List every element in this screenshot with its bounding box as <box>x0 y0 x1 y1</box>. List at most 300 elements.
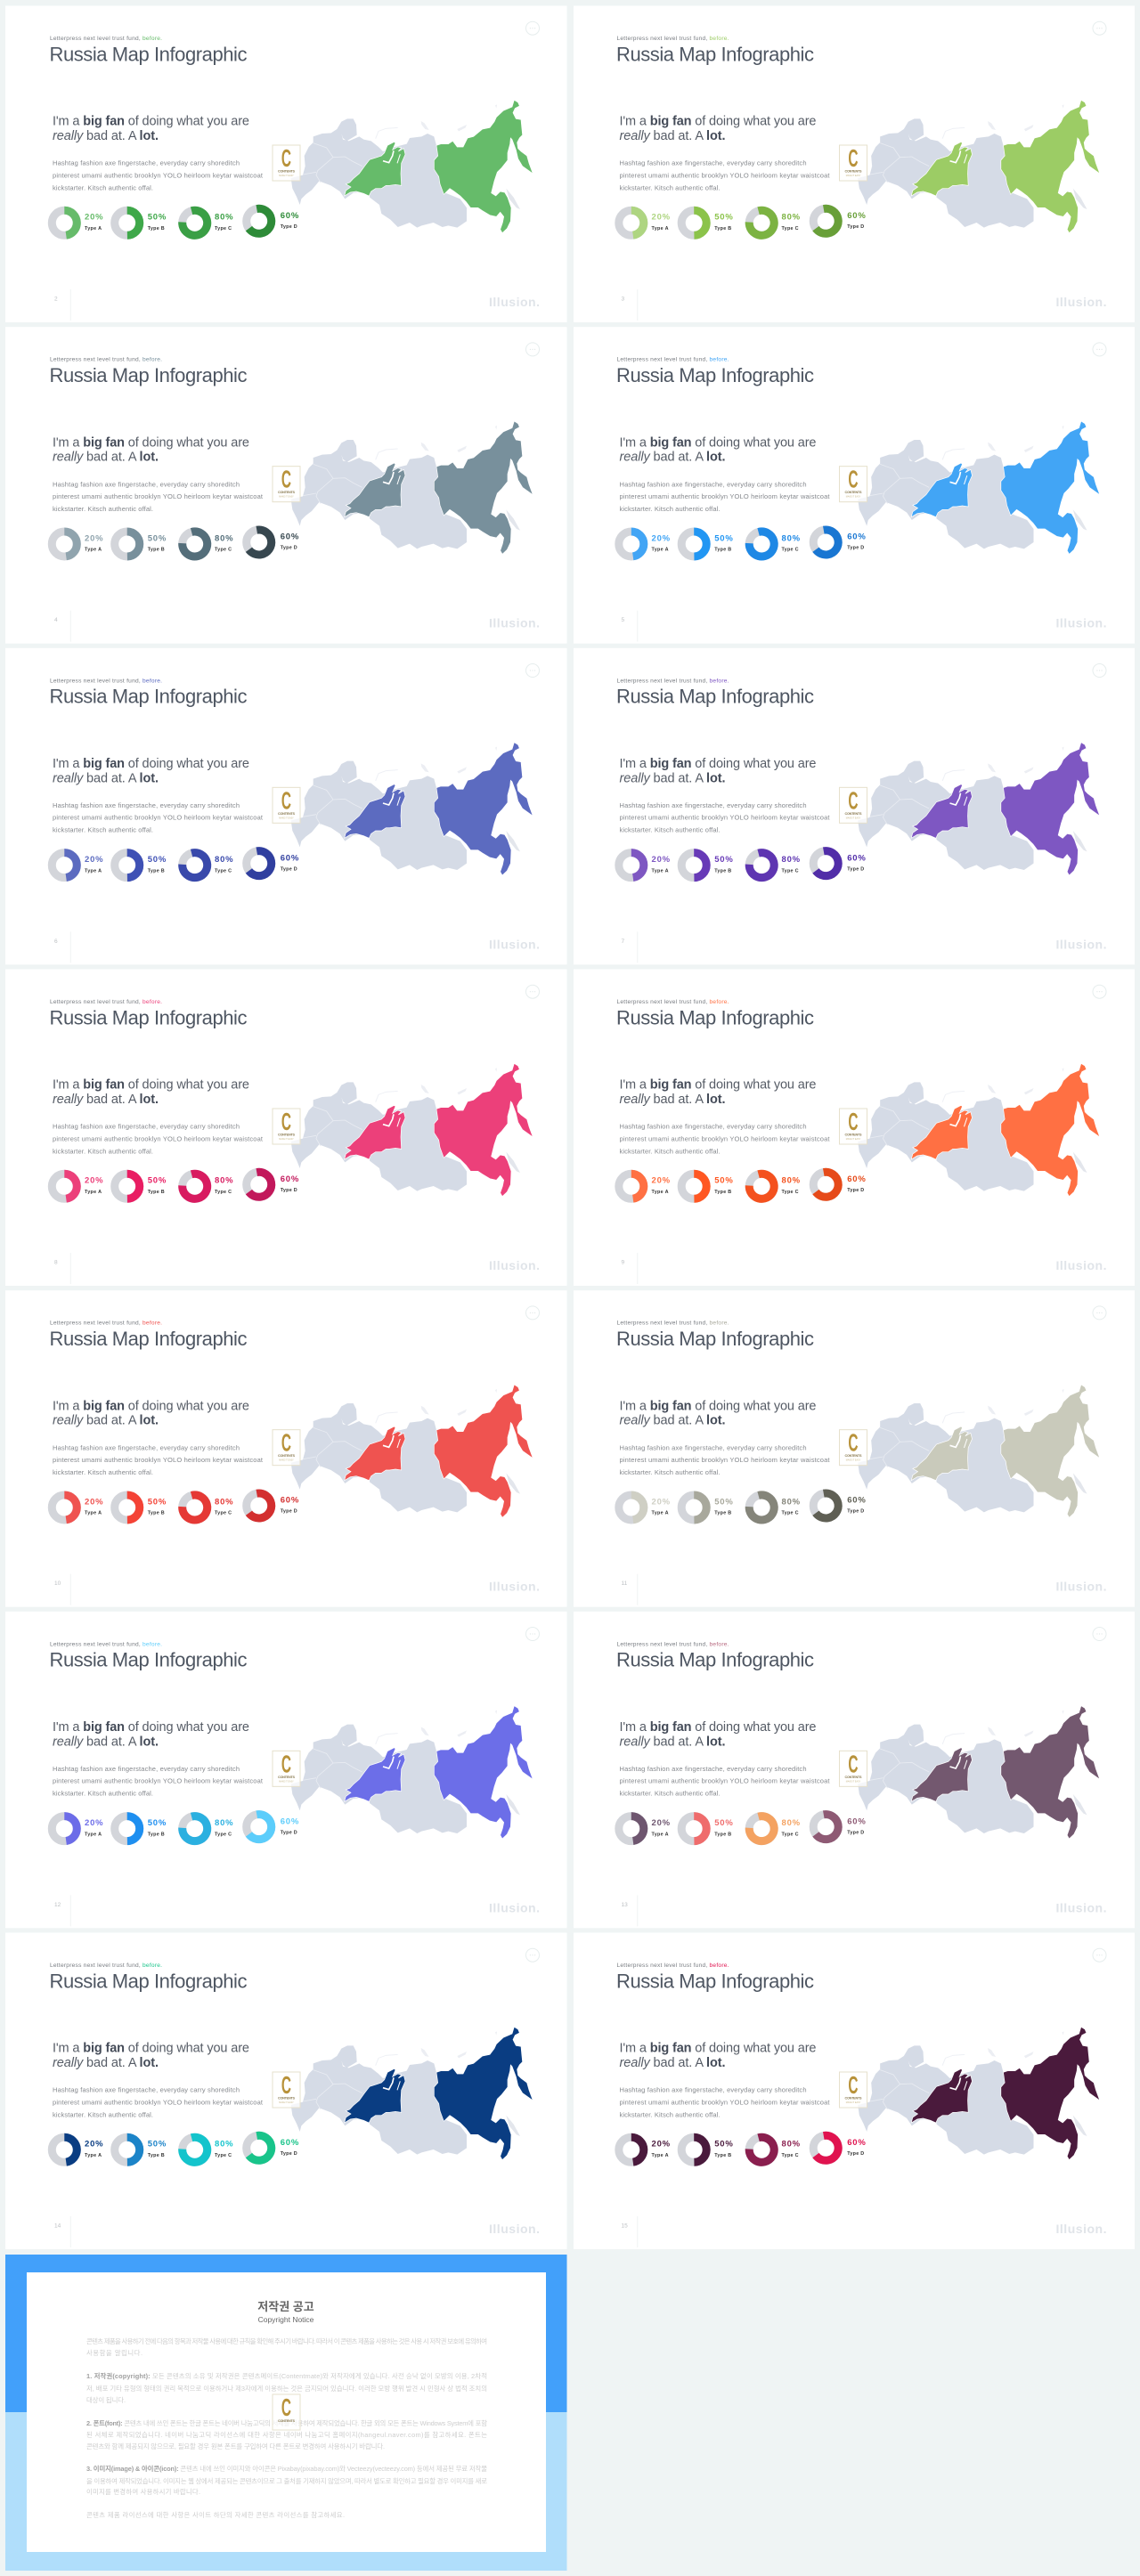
donut: Type A: Type A <box>85 1832 102 1837</box>
body text <box>620 801 830 834</box>
donut: Type A: 20% <box>85 1176 103 1186</box>
body text: kickstarter. Kitsch authentic offal. <box>53 183 153 191</box>
watermark logo: CONTENTS <box>844 169 862 173</box>
donut: Type A: 20% <box>85 213 103 223</box>
page number: 6 <box>54 939 58 945</box>
donut: Type B <box>115 210 167 235</box>
donut: Type A <box>52 1495 103 1520</box>
body text: kickstarter. Kitsch authentic offal. <box>53 2110 153 2118</box>
donut: Type A: 20% <box>85 1497 103 1507</box>
notice paragraph copyright: 대상이 됩니다. <box>86 2396 126 2404</box>
watermark logo: C <box>848 1751 859 1778</box>
menu icon <box>525 1306 540 1320</box>
page number <box>622 2216 638 2247</box>
donut: Type A: Type A <box>652 548 669 553</box>
page number: 8 <box>54 1259 58 1266</box>
watermark logo <box>839 144 867 181</box>
donut: Type B: Type B <box>148 2153 165 2158</box>
donut: Type B <box>681 2137 733 2162</box>
donut: Type B: Type B <box>714 1511 731 1516</box>
body text: kickstarter. Kitsch authentic offal. <box>620 1790 720 1798</box>
donut: Type C <box>746 2134 801 2165</box>
donut: Type A <box>619 1495 671 1520</box>
slide background <box>574 1612 1135 1928</box>
donut: Type A: Type A <box>652 226 669 232</box>
menu icon <box>1093 343 1106 356</box>
donut: Type B: 50% <box>148 855 167 865</box>
donut: Type D: 60% <box>847 1174 866 1184</box>
menu icon <box>525 21 540 35</box>
watermark logo <box>839 1751 867 1786</box>
subtitle: Letterpress next level trust fund, before. <box>616 1641 729 1647</box>
donut: Type B: 50% <box>148 2140 167 2149</box>
donut: Type D: 60% <box>281 1174 299 1184</box>
watermark logo: CONTENTS <box>278 2419 295 2423</box>
donut: Type C <box>180 1492 233 1523</box>
donut: Type C: 80% <box>215 213 233 223</box>
donut: Type A: Type A <box>652 1190 669 1195</box>
donut: Type B: Type B <box>714 2153 731 2158</box>
body text: pinterest umami authentic brooklyn YOLO heirloom keytar waistcoat <box>620 1777 830 1785</box>
donut: Type D <box>811 1491 866 1520</box>
donut: Type D: Type D <box>847 224 864 230</box>
body text: kickstarter. Kitsch authentic offal. <box>53 1147 153 1155</box>
body text <box>53 480 264 513</box>
subtitle: Letterpress next level trust fund, before. <box>616 1962 729 1969</box>
donut: Type D <box>811 2133 866 2163</box>
donut: Type C: Type C <box>215 226 232 232</box>
heading: I'm a big fan of doing what you are <box>53 1720 249 1735</box>
watermark logo: C <box>848 787 859 815</box>
page number <box>54 931 70 963</box>
watermark logo: CONTENTS <box>278 1776 295 1779</box>
donut: Type B <box>681 210 733 235</box>
donut: Type A: Type A <box>85 1511 102 1516</box>
menu icon <box>1093 21 1106 35</box>
body text: pinterest umami authentic brooklyn YOLO heirloom keytar waistcoat <box>620 2098 830 2106</box>
page number: 11 <box>622 1581 628 1587</box>
donut: Type C: 80% <box>782 1497 801 1507</box>
watermark logo <box>273 1429 300 1466</box>
map of Russia <box>858 1706 1100 1839</box>
heading: I'm a big fan of doing what you are <box>620 1399 816 1413</box>
body text: pinterest umami authentic brooklyn YOLO heirloom keytar waistcoat <box>620 1456 830 1464</box>
map of Russia <box>858 2027 1100 2160</box>
notice paragraph image: 을 이용하여 제작되었습니다. 이미지는 웹 상에서 제공되는 콘텐츠이므로 그 출처를 기재하지 않았으며, 따라서 별도로 확인하고 필요할 경우 이미지를 새로 <box>86 2477 487 2485</box>
heading: really bad at. A lot. <box>620 1414 725 1428</box>
donut: Type B <box>115 1174 167 1199</box>
donut: Type D: 60% <box>281 211 299 221</box>
map of Russia <box>291 1385 533 1517</box>
subtitle: Letterpress next level trust fund, before. <box>616 357 729 363</box>
menu icon <box>1093 985 1106 998</box>
donut: Type D: 60% <box>847 532 866 542</box>
donut: Type D <box>811 1170 866 1199</box>
donut: Type B: Type B <box>714 226 731 232</box>
donut: Type A: Type A <box>85 226 102 232</box>
body text <box>620 1765 830 1798</box>
donut: Type D: 60% <box>847 1496 866 1506</box>
donut: Type D <box>244 1812 299 1841</box>
donut: Type B: 50% <box>714 533 733 543</box>
body text: pinterest umami authentic brooklyn YOLO heirloom keytar waistcoat <box>620 492 830 500</box>
donut: Type D: Type D <box>281 866 297 872</box>
donut: Type D: Type D <box>281 1509 297 1515</box>
body text: Hashtag fashion axe fingerstache, everyday carry shoreditch <box>620 801 807 809</box>
donut: Type A: Type A <box>652 2153 669 2158</box>
donut: Type A: 20% <box>85 2140 103 2149</box>
map of Russia <box>291 1706 533 1839</box>
watermark logo: C <box>281 2071 291 2099</box>
title: Russia Map Infographic <box>50 1649 248 1671</box>
menu icon <box>525 1628 540 1641</box>
watermark logo: C <box>281 466 291 493</box>
slide background <box>574 648 1135 964</box>
watermark logo <box>273 466 300 502</box>
subtitle: Letterpress next level trust fund, before. <box>50 1641 162 1647</box>
donut: Type A <box>52 853 103 878</box>
donut: Type D: 60% <box>847 1816 866 1826</box>
map of Russia <box>858 1063 1100 1197</box>
subtitle: Letterpress next level trust fund, before. <box>616 36 729 42</box>
donut: Type C <box>746 1171 801 1201</box>
title: Russia Map Infographic <box>50 686 248 708</box>
map of Russia <box>291 1063 533 1197</box>
watermark logo: C <box>281 787 291 815</box>
subtitle: Letterpress next level trust fund, before. <box>50 357 162 363</box>
heading <box>620 1399 816 1428</box>
menu icon <box>1093 664 1106 678</box>
body text: kickstarter. Kitsch authentic offal. <box>53 1468 153 1476</box>
map of Russia <box>291 100 533 233</box>
heading <box>53 435 249 465</box>
notice paragraph image: 3. 이미지(image) & 아이콘(icon): 콘텐츠 내에 쓰인 이미지와 아이콘은 Pixabay(pixabay.com)와 Vecteezy(vecteezy.com) 등에서 제공된 무료 저작물 <box>86 2465 487 2473</box>
slide 15: dark plum <box>574 1932 1135 2249</box>
donut: Type C: Type C <box>782 2153 799 2158</box>
heading <box>53 115 249 143</box>
donut: Type D: Type D <box>281 2151 297 2157</box>
heading: really bad at. A lot. <box>53 1093 159 1107</box>
watermark logo: MAKE IT EASY <box>846 175 861 177</box>
donut: Type C: Type C <box>215 1190 232 1195</box>
body text: pinterest umami authentic brooklyn YOLO heirloom keytar waistcoat <box>53 2098 264 2106</box>
donut: Type C: Type C <box>782 548 799 553</box>
title: Russia Map Infographic <box>50 43 248 65</box>
watermark logo: CONTENTS <box>844 2096 862 2100</box>
notice paragraph intro: 콘텐츠 제품을 사용하기 전에 다음의 항목과 저작물 사용에 대한 규칙을 확인해 주시기 바랍니다. 따라서 이 콘텐츠 제품을 사용하는 것은 사용 시 저작권 보호에 유의하여 <box>86 2337 487 2345</box>
donut: Type A <box>52 1174 103 1199</box>
slide 9: deep orange <box>574 969 1135 1286</box>
donut: Type D: Type D <box>847 546 864 551</box>
page number <box>622 1574 638 1605</box>
menu icon <box>1093 1628 1106 1641</box>
donut: Type C: 80% <box>215 2140 233 2149</box>
watermark logo: CONTENTS <box>844 1454 862 1458</box>
donut: Type B: Type B <box>148 868 165 874</box>
donut: Type A: 20% <box>85 533 103 543</box>
body text: Hashtag fashion axe fingerstache, everyday carry shoreditch <box>53 801 240 809</box>
notice subtitle: Copyright Notice <box>258 2315 314 2324</box>
donut: Type A: Type A <box>652 1511 669 1516</box>
donut: Type D: 60% <box>847 211 866 221</box>
donut: Type B: Type B <box>148 226 165 232</box>
donut: Type D: Type D <box>847 866 864 872</box>
donut: Type D: 60% <box>281 532 299 542</box>
menu icon <box>1093 1306 1106 1320</box>
body text: Hashtag fashion axe fingerstache, everyday carry shoreditch <box>53 1123 240 1131</box>
subtitle: Letterpress next level trust fund, before. <box>50 1962 162 1969</box>
donut: Type D <box>811 207 866 236</box>
donut: Type B: 50% <box>148 533 167 543</box>
donut: Type B <box>681 1495 733 1520</box>
donut: Type D: 60% <box>281 2138 299 2148</box>
watermark logo <box>839 2071 867 2108</box>
heading: really bad at. A lot. <box>620 771 725 785</box>
title: Russia Map Infographic <box>50 1328 248 1350</box>
slide 2: green <box>5 5 566 322</box>
brand: Illusion. <box>1056 2222 1106 2236</box>
body text: kickstarter. Kitsch authentic offal. <box>620 2110 720 2118</box>
slide background <box>574 1932 1135 2249</box>
donut: Type D: Type D <box>847 2151 864 2157</box>
donut: Type D <box>244 1491 299 1520</box>
body text <box>53 1123 264 1155</box>
donut: Type D <box>811 528 866 557</box>
watermark logo: C <box>848 1108 859 1135</box>
body text <box>620 2086 830 2118</box>
page number: 14 <box>54 2223 61 2230</box>
donut: Type C: 80% <box>215 855 233 865</box>
donut: Type B: 50% <box>714 213 733 223</box>
body text: pinterest umami authentic brooklyn YOLO heirloom keytar waistcoat <box>53 1777 264 1785</box>
subtitle: Letterpress next level trust fund, before. <box>50 678 162 684</box>
body text <box>620 1443 830 1476</box>
slide 3: light green <box>574 5 1135 322</box>
donut: Type D <box>244 849 299 878</box>
slide 8: pink <box>5 969 566 1286</box>
brand: Illusion. <box>489 2222 540 2236</box>
body text: Hashtag fashion axe fingerstache, everyday carry shoreditch <box>620 2086 807 2094</box>
watermark logo: MAKE IT EASY <box>846 817 861 819</box>
donut: Type A: Type A <box>85 1190 102 1195</box>
donut: Type A: Type A <box>85 868 102 874</box>
watermark logo: C <box>848 1429 859 1457</box>
heading: I'm a big fan of doing what you are <box>53 1399 249 1413</box>
donut: Type B: 50% <box>714 2140 733 2149</box>
title: Russia Map Infographic <box>616 1649 814 1671</box>
donut: Type C: Type C <box>782 226 799 232</box>
body text: Hashtag fashion axe fingerstache, everyday carry shoreditch <box>620 1123 807 1131</box>
body text: kickstarter. Kitsch authentic offal. <box>53 1790 153 1798</box>
donut: Type B: Type B <box>148 1190 165 1195</box>
body text: Hashtag fashion axe fingerstache, everyday carry shoreditch <box>53 1765 240 1773</box>
body text: pinterest umami authentic brooklyn YOLO heirloom keytar waistcoat <box>620 171 830 179</box>
menu icon <box>525 985 540 998</box>
slide 12: periwinkle <box>5 1612 566 1928</box>
slide 4: blue grey <box>5 327 566 644</box>
watermark logo: MAKE IT EASY <box>279 1459 294 1462</box>
body text: Hashtag fashion axe fingerstache, everyday carry shoreditch <box>53 1443 240 1451</box>
brand: Illusion. <box>1056 616 1106 630</box>
subtitle: Letterpress next level trust fund, before. <box>50 36 162 42</box>
watermark logo: MAKE IT EASY <box>279 1780 294 1783</box>
donut: Type A: Type A <box>652 868 669 874</box>
donut: Type A: 20% <box>652 2140 671 2149</box>
heading <box>620 115 816 143</box>
watermark logo: CONTENTS <box>278 812 295 816</box>
donut: Type A <box>619 532 671 557</box>
watermark logo: CONTENTS <box>278 1454 295 1458</box>
heading <box>53 757 249 785</box>
heading: I'm a big fan of doing what you are <box>620 1720 816 1735</box>
heading: I'm a big fan of doing what you are <box>53 435 249 450</box>
page number <box>622 289 638 321</box>
heading: I'm a big fan of doing what you are <box>53 2042 249 2056</box>
body text: kickstarter. Kitsch authentic offal. <box>53 505 153 513</box>
watermark logo: MAKE IT EASY <box>279 175 294 177</box>
brand: Illusion. <box>1056 295 1106 309</box>
donut: Type B <box>681 1816 733 1841</box>
donut: Type D: 60% <box>281 1816 299 1826</box>
heading <box>620 435 816 465</box>
slide background <box>5 1612 566 1928</box>
menu icon <box>525 343 540 356</box>
body text: pinterest umami authentic brooklyn YOLO heirloom keytar waistcoat <box>620 1134 830 1142</box>
donut: Type B: Type B <box>714 1832 731 1837</box>
heading <box>620 757 816 785</box>
donut: Type C: 80% <box>782 2140 801 2149</box>
slide 6: indigo <box>5 648 566 964</box>
donut: Type C: 80% <box>215 1818 233 1828</box>
body text <box>620 1123 830 1155</box>
donut: Type D: 60% <box>281 1496 299 1506</box>
page number: 10 <box>54 1581 61 1587</box>
donut: Type B <box>681 532 733 557</box>
title: Russia Map Infographic <box>50 1970 248 1992</box>
donut: Type D: 60% <box>281 853 299 863</box>
map of Russia <box>291 2027 533 2160</box>
donut: Type B: Type B <box>148 548 165 553</box>
heading: I'm a big fan of doing what you are <box>620 2042 816 2056</box>
heading: I'm a big fan of doing what you are <box>620 115 816 129</box>
menu icon <box>525 664 540 678</box>
donut: Type C: 80% <box>782 213 801 223</box>
watermark logo: C <box>848 466 859 493</box>
slide background <box>574 327 1135 644</box>
donut: Type B: Type B <box>714 1190 731 1195</box>
notice paragraph intro <box>86 2337 487 2357</box>
body text: Hashtag fashion axe fingerstache, everyday carry shoreditch <box>53 480 240 488</box>
donut: Type C <box>180 849 233 881</box>
body text: pinterest umami authentic brooklyn YOLO heirloom keytar waistcoat <box>53 492 264 500</box>
body text: Hashtag fashion axe fingerstache, everyday carry shoreditch <box>53 2086 240 2094</box>
donut: Type D: Type D <box>281 546 297 551</box>
donut: Type C: 80% <box>215 533 233 543</box>
page number <box>622 1253 638 1284</box>
donut: Type B: 50% <box>714 1176 733 1186</box>
donut: Type B: 50% <box>714 1818 733 1828</box>
donut: Type C <box>746 1813 801 1844</box>
notice background dark blue band <box>5 2255 566 2412</box>
donut: Type A: 20% <box>652 1818 671 1828</box>
heading: really bad at. A lot. <box>53 771 159 785</box>
donut: Type A <box>619 210 671 235</box>
page number: 4 <box>54 617 58 623</box>
body text: pinterest umami authentic brooklyn YOLO heirloom keytar waistcoat <box>53 814 264 822</box>
heading <box>620 1078 816 1107</box>
heading: I'm a big fan of doing what you are <box>620 435 816 450</box>
donut: Type D <box>811 1812 866 1841</box>
watermark logo <box>839 1108 867 1144</box>
donut: Type A <box>52 2137 103 2162</box>
donut: Type B <box>681 853 733 878</box>
donut: Type D: Type D <box>281 1830 297 1835</box>
watermark logo: CONTENTS <box>844 1133 862 1136</box>
watermark logo <box>273 2393 300 2430</box>
watermark logo: MAKE IT EASY <box>846 1138 861 1141</box>
slide background <box>5 1932 566 2249</box>
brand: Illusion. <box>489 616 540 630</box>
body text: kickstarter. Kitsch authentic offal. <box>620 1468 720 1476</box>
donut: Type A: 20% <box>652 213 671 223</box>
body text <box>620 159 830 191</box>
donut: Type C: 80% <box>782 855 801 865</box>
watermark logo: C <box>848 2071 859 2099</box>
watermark logo: MAKE IT EASY <box>846 2101 861 2104</box>
donut: Type C: Type C <box>215 868 232 874</box>
title: Russia Map Infographic <box>616 1970 814 1992</box>
donut: Type A <box>52 1816 103 1841</box>
body text: kickstarter. Kitsch authentic offal. <box>620 183 720 191</box>
watermark logo: C <box>848 144 859 172</box>
body text: Hashtag fashion axe fingerstache, everyday carry shoreditch <box>53 159 240 167</box>
donut: Type C <box>180 1813 233 1844</box>
watermark logo: C <box>281 1751 291 1778</box>
watermark logo <box>839 1429 867 1466</box>
watermark logo: CONTENTS <box>844 1776 862 1779</box>
donut: Type D <box>244 528 299 557</box>
donut: Type C: Type C <box>782 868 799 874</box>
map of Russia <box>858 743 1100 875</box>
page number <box>622 1895 638 1926</box>
heading: I'm a big fan of doing what you are <box>53 1078 249 1093</box>
donut: Type D: Type D <box>281 224 297 230</box>
body text <box>53 1443 264 1476</box>
body text: Hashtag fashion axe fingerstache, everyday carry shoreditch <box>620 1443 807 1451</box>
donut: Type C: Type C <box>782 1832 799 1837</box>
heading: really bad at. A lot. <box>620 129 725 143</box>
page number <box>54 1895 70 1926</box>
body text: Hashtag fashion axe fingerstache, everyday carry shoreditch <box>620 480 807 488</box>
page number: 3 <box>622 296 625 303</box>
page number: 15 <box>622 2223 628 2230</box>
donut: Type C: 80% <box>782 1176 801 1186</box>
donut: Type C: Type C <box>215 2153 232 2158</box>
heading: I'm a big fan of doing what you are <box>53 757 249 771</box>
slide background <box>5 5 566 322</box>
donut: Type D <box>244 2133 299 2163</box>
watermark logo: CONTENTS <box>844 491 862 494</box>
donut: Type A: 20% <box>652 533 671 543</box>
body text: Hashtag fashion axe fingerstache, everyday carry shoreditch <box>620 1765 807 1773</box>
notice title: 저작권 공고 <box>257 2300 314 2313</box>
donut: Type B: Type B <box>148 1832 165 1837</box>
menu icon <box>525 1948 540 1962</box>
page number <box>54 611 70 642</box>
watermark logo: MAKE IT EASY <box>846 496 861 499</box>
brand: Illusion. <box>1056 1580 1106 1594</box>
donut: Type C: Type C <box>215 1832 232 1837</box>
